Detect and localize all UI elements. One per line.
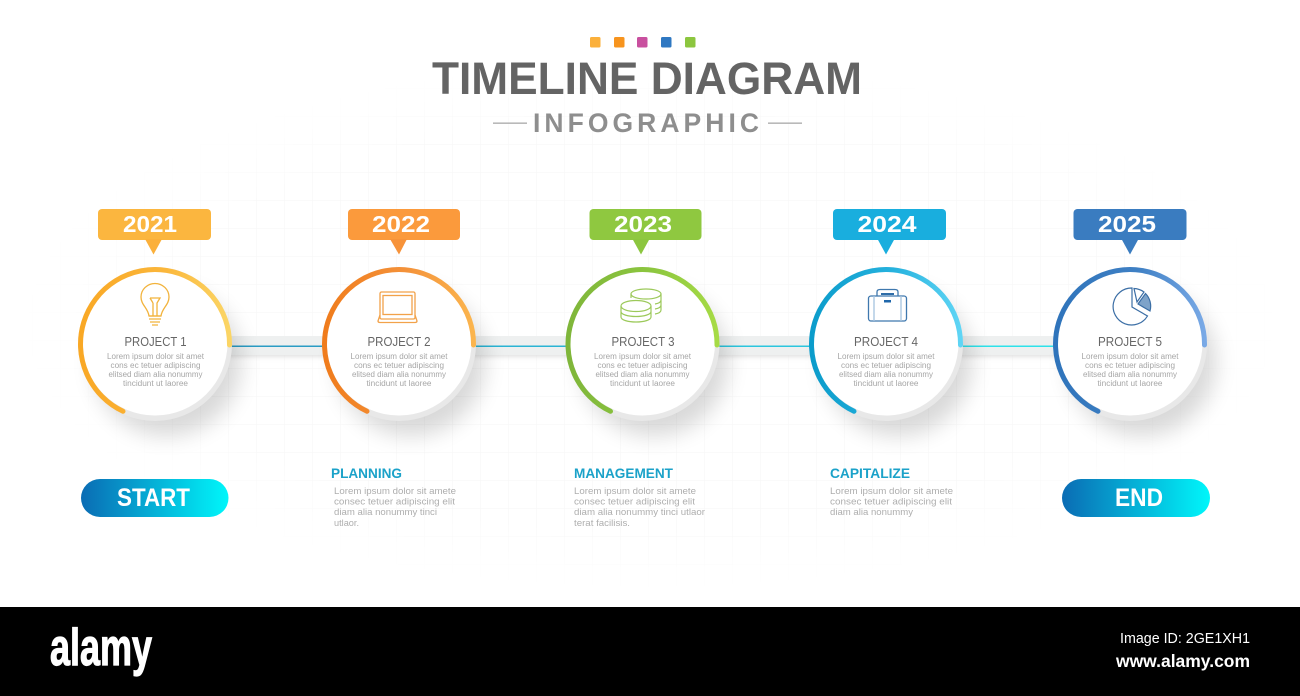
project 2 text: tincidunt ut laoree	[366, 379, 432, 388]
project 3 text	[594, 352, 692, 388]
year tag 2025	[1074, 209, 1186, 254]
project 3 text: cons ec tetuer adipiscing	[598, 361, 688, 370]
text block: capitalize: diam alia nonummy	[830, 507, 913, 518]
project 4 text: elitsed diam alia nonummy	[839, 370, 933, 379]
year tag 2024: 2024	[858, 211, 917, 237]
text block: capitalize: CAPITALIZE	[830, 465, 910, 481]
project 1 text: elitsed diam alia nonummy	[108, 370, 202, 379]
text block: capitalize	[830, 465, 953, 518]
alamy logo: alamy	[50, 619, 152, 677]
end pill: END	[1115, 484, 1163, 512]
project 4 text: cons ec tetuer adipiscing	[841, 361, 931, 370]
icon: light bulb	[141, 284, 169, 325]
project 3 heading: PROJECT 3	[612, 335, 675, 349]
text block: management	[574, 465, 705, 529]
project 5 text: tincidunt ut laoree	[1098, 379, 1163, 388]
text block: management: Lorem ipsum dolor sit amete	[574, 486, 696, 497]
footer bar	[0, 607, 1300, 696]
text block: planning: PLANNING	[331, 465, 402, 481]
panel: project 2	[322, 267, 485, 436]
year tag 2023	[590, 209, 702, 254]
year tag 2025: 2025	[1098, 211, 1156, 237]
start pill: START	[117, 484, 190, 512]
year tag 2021	[98, 209, 211, 254]
year tag 2023: 2023	[614, 211, 672, 237]
panel: project 3	[566, 267, 728, 436]
project 1 text	[107, 352, 205, 388]
icon: pie chart	[1113, 288, 1151, 325]
panel: project 4	[809, 267, 972, 436]
subtitle: INFOGRAPHIC	[533, 108, 759, 138]
project 5 text: cons ec tetuer adipiscing	[1085, 361, 1175, 370]
title: TIMELINE DIAGRAM	[432, 53, 862, 104]
project 1 text: Lorem ipsum dolor sit amet	[107, 352, 205, 361]
text block: management: terat facilisis.	[574, 518, 630, 529]
text block: management: consec tetuer adipiscing elit	[574, 496, 695, 508]
project 5 text: Lorem ipsum dolor sit amet	[1082, 352, 1179, 361]
project 1 text: cons ec tetuer adipiscing	[110, 361, 200, 370]
start pill	[81, 479, 228, 517]
project 4 text: tincidunt ut laoree	[854, 379, 919, 388]
website: www.alamy.com	[1115, 651, 1250, 671]
project 3 text: Lorem ipsum dolor sit amet	[594, 352, 692, 361]
text block: management: MANAGEMENT	[574, 465, 673, 481]
project 2 text	[350, 352, 448, 388]
text block: planning: utlaor.	[334, 518, 359, 529]
project 3 text: tincidunt ut laoree	[610, 379, 676, 388]
icon: briefcase	[868, 290, 906, 321]
text block: management: diam alia nonummy tinci utlaor	[574, 507, 705, 518]
year tag 2022	[348, 209, 460, 254]
image id: Image ID: 2GE1XH1	[1120, 630, 1250, 647]
text block: capitalize: consec tetuer adipiscing elit	[830, 496, 952, 508]
project 5 heading: PROJECT 5	[1098, 335, 1162, 349]
icon: laptop	[378, 292, 417, 322]
project 2 text: elitsed diam alia nonummy	[352, 370, 446, 379]
panel: project 5	[1053, 267, 1216, 436]
text block: planning: diam alia nonummy tinci	[334, 507, 437, 518]
text block: capitalize: Lorem ipsum dolor sit amete	[830, 486, 953, 497]
project 4 text	[838, 352, 935, 388]
end pill	[1062, 479, 1210, 517]
project 4 text: Lorem ipsum dolor sit amet	[838, 352, 935, 361]
project 1 text: tincidunt ut laoree	[123, 379, 189, 388]
icon: coins	[621, 289, 661, 322]
year tag 2024	[833, 209, 946, 254]
project 3 text: elitsed diam alia nonummy	[596, 370, 690, 379]
year tag 2022: 2022	[372, 211, 430, 237]
colour squares	[590, 37, 696, 48]
project 2 text: Lorem ipsum dolor sit amet	[350, 352, 448, 361]
project 4 heading: PROJECT 4	[854, 335, 918, 349]
project 2 heading: PROJECT 2	[368, 335, 431, 349]
project 1 heading: PROJECT 1	[124, 335, 187, 349]
year tag 2021: 2021	[123, 211, 177, 237]
text block: planning: consec tetuer adipiscing elit	[334, 496, 455, 508]
project 2 text: cons ec tetuer adipiscing	[354, 361, 444, 370]
panel: project 1	[78, 267, 241, 436]
connector track	[225, 336, 1065, 356]
text block: planning: Lorem ipsum dolor sit amete	[334, 486, 456, 497]
project 5 text: elitsed diam alia nonummy	[1083, 370, 1177, 379]
text block: planning	[331, 465, 456, 529]
project 5 text	[1082, 352, 1179, 388]
